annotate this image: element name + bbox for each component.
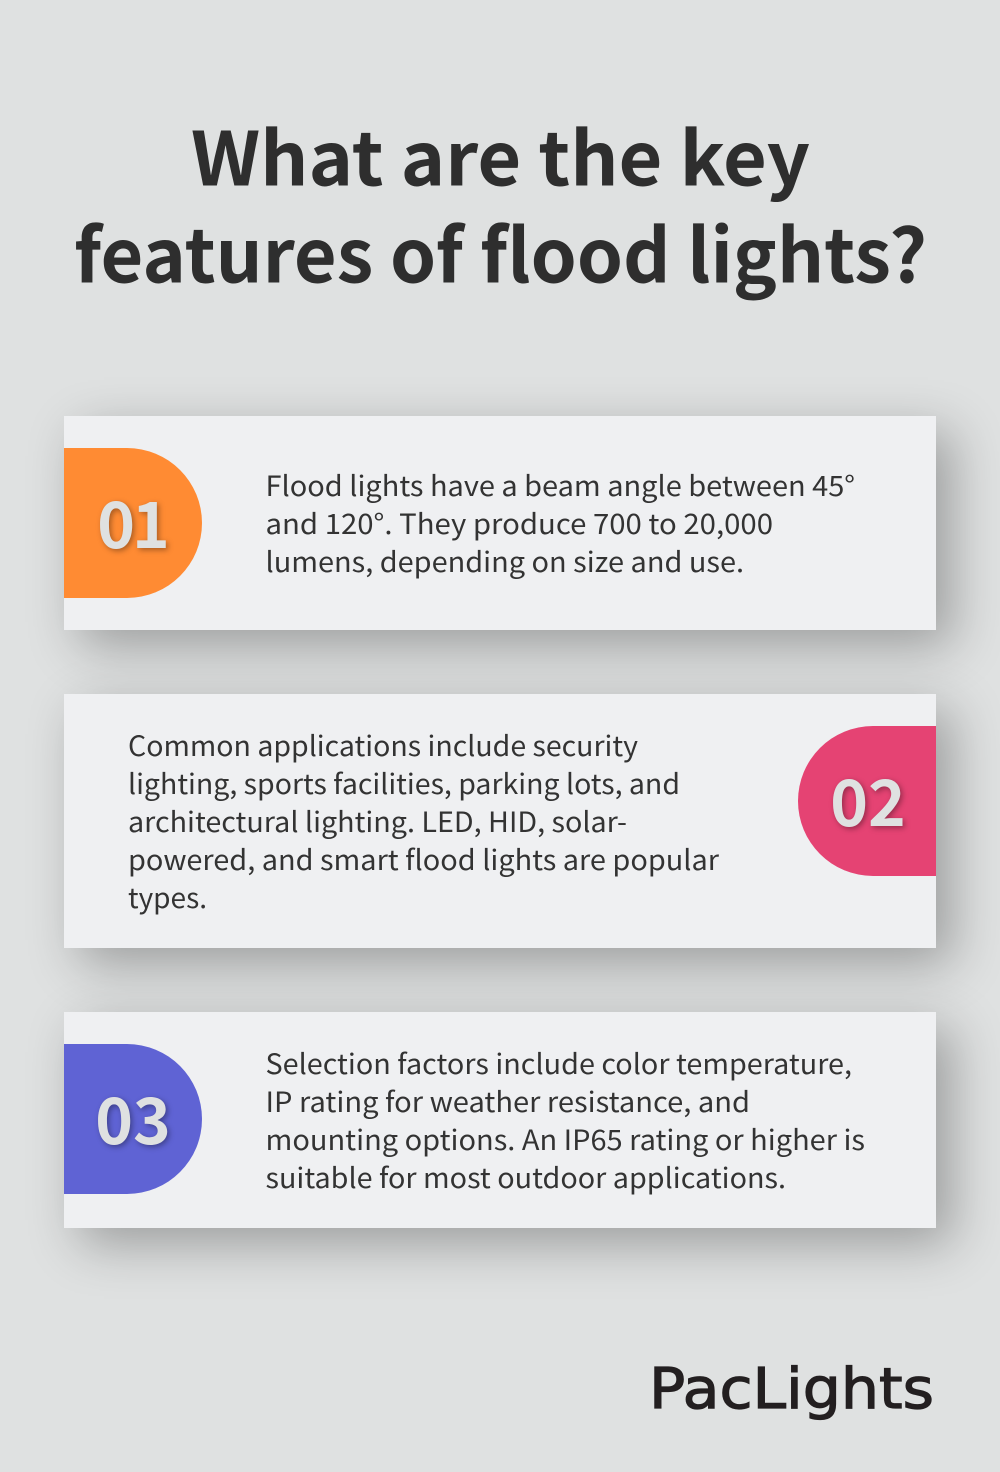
card 2 text: architectural lighting. LED, HID, solar- (128, 801, 627, 841)
badge 02 (798, 726, 936, 876)
title: features of flood lights? (74, 198, 927, 304)
panel: card 2 (64, 694, 936, 948)
badge 03 (64, 1044, 202, 1194)
badge 03: 03 (95, 1071, 171, 1163)
title: What are the key (191, 100, 810, 208)
card 1 text: and 120°. They produce 700 to 20,000 (266, 503, 773, 543)
card 3 text (266, 1043, 865, 1197)
badge 02: 02 (830, 753, 906, 845)
card 3 text: mounting options. An IP65 rating or higher is (266, 1119, 865, 1159)
title (74, 100, 927, 304)
panel: card 1 (64, 416, 936, 630)
logo: PacLights: PacLights (649, 1357, 934, 1422)
card 2 text (128, 725, 719, 917)
card 3 text: IP rating for weather resistance, and (266, 1081, 750, 1121)
card 2 text: Common applications include security (128, 725, 638, 765)
card 1 text: Flood lights have a beam angle between 45° (266, 465, 855, 505)
panel: card 3 (64, 1012, 936, 1228)
card 2 text: types. (128, 877, 207, 917)
card 3 text: suitable for most outdoor applications. (266, 1157, 786, 1197)
badge 01 (64, 448, 202, 598)
badge 01: 01 (97, 475, 167, 567)
card 3 text: Selection factors include color temperature, (266, 1043, 852, 1083)
card 1 text: lumens, depending on size and use. (266, 541, 744, 581)
card 1 text (266, 465, 855, 581)
card 2 text: lighting, sports facilities, parking lots, and (128, 763, 680, 803)
card 2 text: powered, and smart flood lights are popular (128, 839, 719, 879)
